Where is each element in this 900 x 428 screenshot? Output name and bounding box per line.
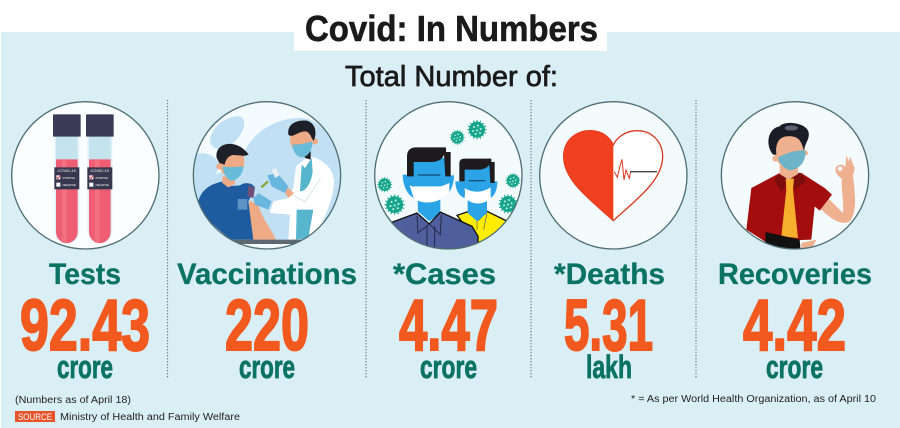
icon: test tubes: COVID-19 — [90, 168, 110, 173]
icon: test tubes: COVID-19 — [57, 168, 77, 173]
panel: recoveries — [718, 102, 872, 385]
unit: deaths: lakh — [586, 349, 632, 385]
source: Ministry of Health and Family Welfare — [60, 412, 240, 423]
icon: test tubes: POSITIVE — [63, 176, 75, 180]
icon: test tubes: NEGATIVE — [63, 183, 76, 187]
note: date: (Numbers as of April 18) — [15, 395, 131, 406]
icon: masked people with virus — [375, 102, 522, 255]
number: tests: 92.43 — [20, 286, 150, 366]
number: recoveries: 4.42 — [743, 286, 846, 366]
panel: cases — [375, 102, 522, 385]
unit: vaccinations: crore — [239, 349, 295, 385]
number: vaccinations: 220 — [225, 286, 309, 366]
subtitle: Total Number of: — [345, 61, 558, 93]
title: Covid: In Numbers — [305, 8, 598, 49]
label: cases: *Cases — [393, 258, 496, 291]
panel: deaths — [540, 102, 687, 385]
icon: masked man showing OK sign — [721, 102, 869, 251]
panel: vaccinations — [177, 102, 357, 385]
unit: cases: crore — [420, 349, 477, 385]
icon: test tubes — [12, 102, 159, 249]
note: WHO: * = As per World Health Organization, as of April 10 — [631, 394, 876, 405]
source — [15, 411, 240, 423]
label: tests: Tests — [49, 258, 121, 291]
panel: tests — [12, 102, 159, 385]
icon: test tubes: POSITIVE — [96, 176, 108, 180]
source: SOURCE — [18, 412, 52, 423]
icon: heart with flatline — [540, 102, 687, 249]
unit: tests: crore — [57, 349, 113, 385]
icon: test tubes: NEGATIVE — [96, 183, 109, 187]
label: deaths: *Deaths — [554, 258, 665, 291]
unit: recoveries: crore — [766, 349, 823, 385]
label: recoveries: Recoveries — [718, 258, 872, 291]
number: deaths: 5.31 — [564, 286, 653, 366]
label: vaccinations: Vaccinations — [177, 258, 357, 291]
icon: doctor vaccinating patient — [190, 102, 343, 255]
number: cases: 4.47 — [399, 286, 498, 366]
